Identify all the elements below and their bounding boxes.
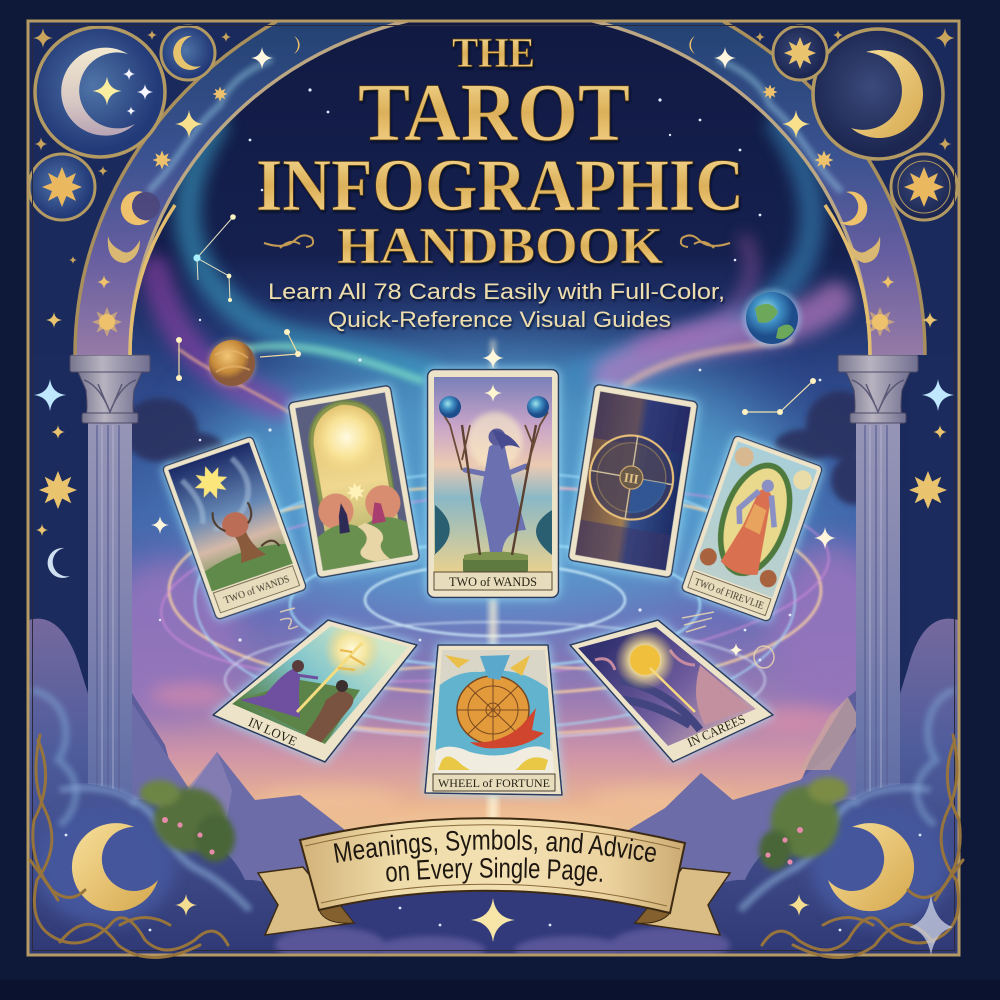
lower sky purple glow xyxy=(100,560,240,720)
banner: on Every Single Page. xyxy=(386,857,602,886)
crescent moon bottom left xyxy=(72,823,158,911)
card: in careers: IN CAREES xyxy=(685,711,748,750)
lower sky purple glow right xyxy=(762,531,856,674)
card: star and tree, two of wands xyxy=(162,436,307,620)
card: in love: IN LOVE xyxy=(246,714,299,749)
medallion: star left xyxy=(29,154,95,220)
figure xyxy=(480,444,526,552)
medallion: large gold moon right xyxy=(813,29,943,159)
trees left xyxy=(140,780,235,862)
back clouds left xyxy=(30,618,88,790)
side stars right xyxy=(909,379,954,574)
medallion: small star right xyxy=(773,26,827,80)
shaft xyxy=(88,423,132,823)
title xyxy=(256,31,744,275)
lower clouds left xyxy=(30,686,275,954)
subtitle: Quick-Reference Visual Guides xyxy=(328,307,671,332)
crescent gold xyxy=(851,50,923,138)
large star under banner xyxy=(471,898,515,942)
card: in love xyxy=(213,620,417,762)
card: two of firevlie: TWO of FIREVLIE xyxy=(693,577,765,612)
pillar left xyxy=(70,355,150,823)
planet left xyxy=(208,339,256,387)
vertical light beam xyxy=(488,340,498,835)
card: two of firevlie xyxy=(681,435,823,622)
pillar right xyxy=(838,355,918,823)
mountains left xyxy=(132,693,345,882)
lower night sky under banner xyxy=(342,892,646,954)
crescent moon bottom right xyxy=(828,823,914,911)
label strip xyxy=(213,566,300,613)
sky inside the arch xyxy=(100,0,890,960)
subtitle: Learn All 78 Cards Easily with Full-Color, xyxy=(268,279,725,304)
arch band xyxy=(75,0,925,355)
sky gradient xyxy=(132,22,868,830)
banner xyxy=(256,817,732,936)
side stars left xyxy=(34,379,77,578)
card: star and tree, two of wands: TWO of WANDS xyxy=(223,574,291,607)
central glow xyxy=(195,345,795,615)
banner body xyxy=(300,818,685,913)
lower clouds right xyxy=(712,686,958,954)
card: wheel of fortune: WHEEL of FORTUNE xyxy=(438,776,550,790)
title flourish left xyxy=(264,235,313,248)
planet right xyxy=(743,289,801,347)
title: TAROT xyxy=(358,66,630,158)
medallion: large pale moon xyxy=(35,27,165,157)
title: HANDBOOK xyxy=(337,218,664,275)
left tail xyxy=(258,867,354,935)
vine left xyxy=(30,735,228,958)
nebula left xyxy=(155,125,835,440)
trees right xyxy=(759,777,848,870)
corner ornaments left xyxy=(33,28,231,328)
sparkles beside moons xyxy=(175,894,810,916)
card: two of wands centre xyxy=(428,370,558,598)
card: sunlit path xyxy=(288,385,420,578)
title: THE xyxy=(452,31,535,77)
dark side clouds upper xyxy=(122,391,879,505)
sunset clouds xyxy=(148,676,839,804)
arch outlines xyxy=(75,0,925,355)
arch band nebula xyxy=(150,60,840,190)
card: wheel of fortune xyxy=(425,645,562,795)
card: in careers xyxy=(570,620,773,762)
bottom center clouds xyxy=(274,926,732,954)
subtitle xyxy=(268,279,725,332)
watermark sparkle xyxy=(909,895,953,955)
capital xyxy=(70,355,150,372)
side wall shading xyxy=(29,355,958,960)
star field xyxy=(65,88,921,931)
mountains right xyxy=(628,691,856,882)
medallion: small moon left xyxy=(161,26,215,80)
band icons right xyxy=(689,36,895,337)
wands xyxy=(462,425,536,555)
spandrel background xyxy=(30,22,958,693)
constellation left lower xyxy=(176,329,301,381)
right tail xyxy=(635,868,730,935)
constellation right xyxy=(742,378,816,415)
back clouds right xyxy=(900,618,958,790)
corner ornaments right xyxy=(755,28,955,328)
card: split wheel: III xyxy=(623,471,640,487)
title: INFOGRAPHIC xyxy=(256,145,744,227)
vine right xyxy=(762,735,963,958)
card: split wheel xyxy=(568,384,698,578)
card: two of wands centre: TWO of WANDS xyxy=(449,574,537,589)
orbit rings xyxy=(153,464,837,738)
tail folds xyxy=(319,905,670,923)
banner text: Meanings, Symbols, and Advice xyxy=(334,829,656,863)
crescent pale xyxy=(61,48,135,136)
bottom dark strip xyxy=(0,980,1000,1000)
band icons left xyxy=(92,36,300,337)
accent sparkles xyxy=(151,347,836,657)
title flourish right xyxy=(681,235,730,248)
glyph marks between cards xyxy=(280,608,774,668)
medallion: star right xyxy=(891,154,957,220)
constellation left upper xyxy=(193,214,236,302)
